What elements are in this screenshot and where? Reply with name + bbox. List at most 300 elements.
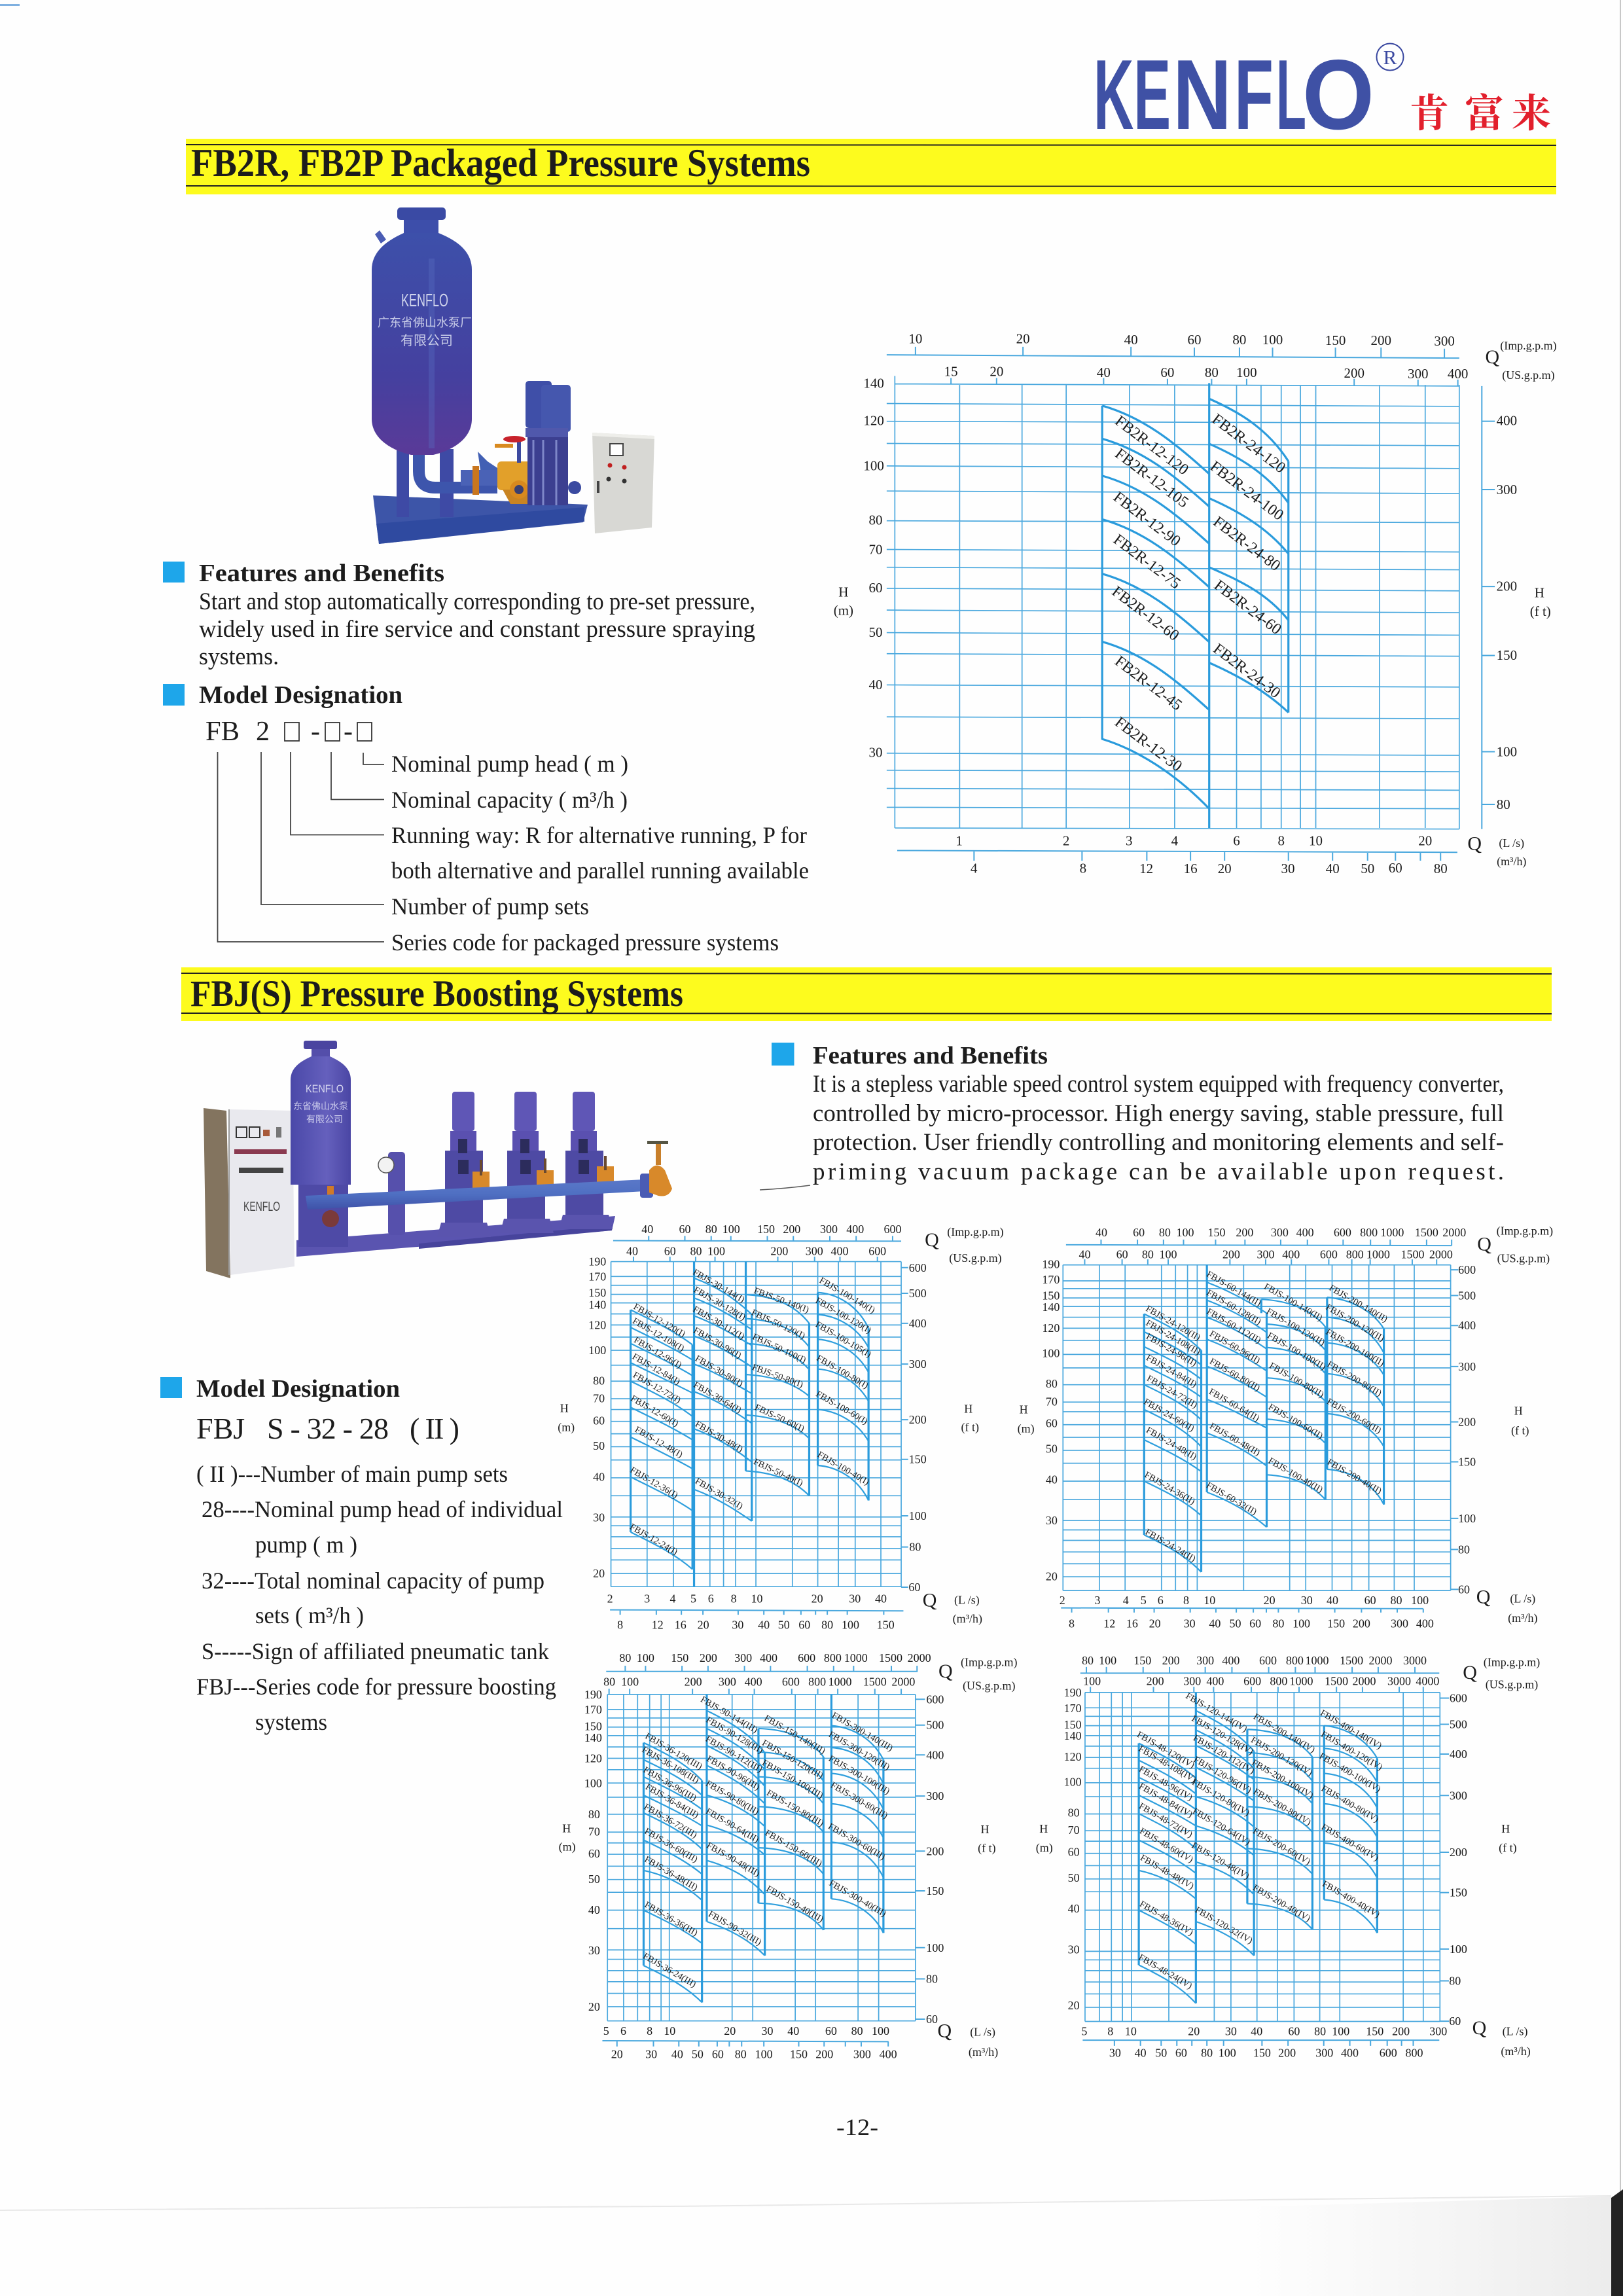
axis numbers: 140 [588, 1299, 606, 1312]
axis numbers: 16 [1184, 861, 1198, 876]
axis titles and units [559, 1656, 1018, 2059]
axis numbers: 140 [863, 375, 884, 391]
axis numbers: 200 [685, 1675, 702, 1688]
features and benefits: FB2R: Start and stop automatically corresponding to pre-set pressure, [199, 588, 755, 615]
curve labels: FBJS-100-100(II) [1266, 1331, 1327, 1372]
curve labels: FBJS-50-120(I) [750, 1308, 807, 1342]
axis numbers: 100 [1236, 365, 1257, 380]
curve labels: FBJS-36-36(III) [643, 1900, 700, 1939]
axis titles and units: (f t) [1511, 1424, 1529, 1438]
performance chart: FB2R [834, 331, 1557, 876]
axis numbers: 150 [790, 2047, 808, 2060]
axis numbers: 400 [1416, 1617, 1434, 1630]
axis numbers: 200 [1371, 332, 1391, 348]
axis numbers: 400 [909, 1317, 927, 1330]
axis numbers: 12 [652, 1618, 664, 1631]
axis numbers: 300 [719, 1675, 736, 1688]
axis numbers: 30 [1109, 2047, 1121, 2060]
curve labels: FBJS-200-40(II) [1325, 1458, 1383, 1497]
grid lines [1085, 1693, 1440, 2022]
features and benefits: FB2R: systems. [199, 643, 279, 670]
axis numbers: 140 [1042, 1300, 1060, 1314]
axis numbers: 70 [1068, 1823, 1080, 1837]
model designation: FB2R: Running way: R for alternative running, P for [391, 822, 807, 848]
axis numbers: 40 [1251, 2025, 1262, 2038]
curve labels: FBJS-90-48(III) [705, 1840, 762, 1879]
axis titles and units: (Imp.g.p.m) [1500, 339, 1557, 353]
axis numbers: 8 [1069, 1617, 1075, 1630]
axis numbers: 200 [700, 1651, 717, 1664]
axis numbers: 80 [1390, 1594, 1402, 1607]
curve labels: FB2R-12-105 [1112, 445, 1192, 511]
curve labels: FBJS-24-48(II) [1144, 1426, 1198, 1462]
axis numbers: 100 [1497, 744, 1517, 760]
axis numbers: 500 [1450, 1717, 1467, 1731]
curve labels: FBJS-200-100(II) [1324, 1327, 1386, 1369]
axis numbers: 2000 [891, 1675, 915, 1688]
axis numbers: 300 [806, 1245, 823, 1258]
axis numbers: 40 [1124, 332, 1138, 348]
curve labels: FBJS-50-40(I) [752, 1457, 804, 1488]
curve labels: FBJS-60-48(II) [1207, 1422, 1262, 1458]
axis numbers: 50 [1361, 861, 1374, 876]
curve labels: FBJS-12-120(I) [632, 1302, 687, 1340]
axis titles and units: (Imp.g.p.m) [1497, 1225, 1553, 1238]
axis numbers: 3000 [1387, 1675, 1411, 1688]
axis numbers: 60 [1133, 1226, 1145, 1239]
axis numbers: 1000 [844, 1651, 868, 1664]
axis numbers: 150 [1064, 1718, 1082, 1731]
curve labels: FBJS-60-144(II) [1205, 1270, 1262, 1309]
axis numbers: 100 [1293, 1617, 1310, 1630]
axis numbers: 30 [1184, 1617, 1196, 1630]
axis numbers: 80 [1068, 1806, 1080, 1819]
axis numbers: 4000 [1416, 1675, 1439, 1688]
axis numbers: 200 [783, 1223, 800, 1236]
curve labels: FBJS-200-80(II) [1325, 1359, 1383, 1399]
features and benefits: FB2R: widely used in fire service and constant pressure spraying [199, 616, 755, 643]
axis numbers: 80 [821, 1618, 833, 1631]
axis numbers: 300 [1497, 482, 1517, 497]
curve labels: FB2R-12-45 [1111, 653, 1185, 714]
page number: -12- [836, 2114, 878, 2140]
axis numbers: 100 [707, 1245, 725, 1258]
curve labels: FBJS-30-144(I) [691, 1268, 746, 1305]
axis numbers: 8 [1183, 1594, 1189, 1607]
axis numbers: 150 [588, 1286, 606, 1299]
curve labels: FBJS-100-80(I) [815, 1354, 870, 1391]
axis numbers: 6 [708, 1592, 714, 1605]
curve labels: FBJS-12-36(I) [628, 1465, 679, 1501]
axis titles and units: (m³/h) [953, 1612, 982, 1626]
axis titles and units: H [1535, 585, 1544, 601]
axis numbers: 60 [1288, 2025, 1300, 2038]
axis numbers: 1 [955, 833, 963, 848]
axis numbers: 600 [868, 1245, 886, 1258]
axis numbers: 600 [1450, 1692, 1467, 1705]
axis numbers: 80 [1046, 1377, 1058, 1390]
logo: KENFLO: L [1276, 39, 1306, 151]
model designation: FB2R: 2 [256, 717, 270, 747]
axis numbers: 150 [926, 1884, 944, 1897]
axis numbers: 30 [1281, 861, 1294, 876]
axis numbers: 400 [880, 2047, 897, 2060]
curve labels: FBJS-150-60(III) [763, 1828, 824, 1869]
axis numbers: 100 [1458, 1512, 1476, 1525]
curve labels: FBJS-60-32(II) [1204, 1480, 1258, 1518]
axis numbers: 800 [1270, 1675, 1287, 1688]
curve labels: FBJS-90-96(III) [705, 1754, 762, 1793]
axis numbers: 200 [1353, 1617, 1370, 1630]
axis numbers: 1500 [1325, 1675, 1348, 1688]
axis numbers: 100 [637, 1651, 654, 1664]
axis numbers: 140 [584, 1731, 602, 1744]
axis numbers: 600 [926, 1693, 944, 1706]
curve labels: FBJS-24-72(II) [1145, 1374, 1199, 1410]
model designation: FB2R: Series code for packaged pressure systems [391, 929, 779, 956]
axis numbers: 20 [1149, 1617, 1161, 1630]
axis numbers: 300 [1315, 2047, 1333, 2060]
axis numbers: 200 [1147, 1675, 1164, 1688]
curve labels: FBJS-60-96(II) [1207, 1329, 1262, 1366]
axis titles and units: (m³/h) [969, 2045, 998, 2059]
axis titles and units: Q [1477, 1234, 1491, 1255]
product photo: FB2R packaged pressure system: 有限公司 [401, 333, 453, 348]
axis numbers: 400 [831, 1245, 849, 1258]
curve labels: FBJS-300-100(III) [827, 1754, 891, 1797]
axis numbers: 80 [869, 512, 882, 528]
curve labels: FBJS-30-32(I) [693, 1477, 745, 1512]
axis numbers: 20 [1264, 1594, 1275, 1607]
axis numbers: 400 [760, 1651, 777, 1664]
curve labels: FBJS-30-48(I) [693, 1420, 745, 1455]
curve labels: FBJS-36-72(III) [642, 1802, 699, 1840]
axis numbers: 80 [1272, 1617, 1284, 1630]
curve labels: FBJS-36-24(III) [641, 1952, 698, 1990]
axis numbers: 20 [611, 2047, 623, 2060]
axis numbers: 1500 [1340, 1654, 1363, 1667]
axis numbers: 2000 [908, 1651, 931, 1664]
pump curves [1139, 1693, 1377, 2003]
curve labels: FBJS-300-120(III) [827, 1730, 891, 1772]
curve labels: FBJS-48-84(IV) [1137, 1782, 1194, 1820]
curve labels: FBJS-50-140(I) [753, 1286, 810, 1316]
model designation: FBJ(S): S-----Sign of affiliated pneumatic tank [202, 1638, 549, 1664]
curve labels: FBJS-120-128(IV) [1190, 1714, 1255, 1757]
axis numbers: 3 [1094, 1594, 1100, 1607]
curve labels: FBJS-36-96(III) [641, 1765, 698, 1804]
curve labels: FBJS-30-64(I) [692, 1380, 743, 1416]
axis numbers: 50 [1230, 1617, 1241, 1630]
logo: KENFLO: N [1173, 39, 1232, 151]
axis numbers: 300 [1271, 1226, 1289, 1239]
axis numbers: 16 [1126, 1617, 1138, 1630]
axis numbers: 800 [1346, 1248, 1364, 1261]
axis numbers: 40 [758, 1618, 770, 1631]
curve labels: FBJS-100-60(I) [814, 1390, 869, 1427]
axis titles and units: H [838, 584, 848, 600]
curve labels: FBJS-36-120(III) [643, 1731, 704, 1772]
axis numbers: 80 [705, 1223, 717, 1236]
axis numbers: 10 [664, 2024, 675, 2037]
axis numbers: 100 [1219, 2047, 1236, 2060]
axis numbers: 40 [1097, 365, 1111, 380]
axis numbers: 1500 [863, 1675, 887, 1688]
axis numbers: 10 [908, 331, 922, 347]
model designation: FB2R: Nominal capacity ( m³/h ) [391, 787, 628, 813]
curve labels: FBJS-60-112(II) [1205, 1307, 1262, 1346]
curve labels: FBJS-90-32(III) [706, 1909, 763, 1948]
axis numbers: 30 [1301, 1594, 1313, 1607]
axis numbers: 4 [1171, 833, 1179, 848]
axis numbers: 20 [1046, 1570, 1058, 1583]
axis titles and units: (L /s) [954, 1594, 980, 1607]
curve labels: FBJS-60-80(II) [1207, 1357, 1262, 1393]
curve labels: FBJS-400-120(IV) [1319, 1730, 1384, 1773]
model designation: FBJ(S): FBJ---Series code for pressure boosting [196, 1674, 556, 1700]
axis numbers [1064, 1654, 1467, 2060]
axis numbers: 50 [778, 1618, 790, 1631]
axis numbers: 4 [670, 1592, 676, 1605]
axis numbers: 80 [1082, 1654, 1094, 1667]
axis numbers: 30 [1046, 1514, 1058, 1527]
curve labels: FBJS-24-108(II) [1144, 1318, 1202, 1357]
features and benefits: FBJ(S): protection. User friendly controlling and monitoring elements and self- [813, 1129, 1504, 1156]
axis numbers: 30 [762, 2024, 774, 2037]
axis numbers: 60 [1449, 2015, 1461, 2028]
axis numbers: 20 [990, 364, 1003, 380]
axis numbers: 500 [926, 1719, 944, 1732]
axis numbers: 40 [1326, 861, 1340, 876]
model designation: FBJ(S) [160, 1375, 563, 1735]
curve labels: FBJS-100-120(I) [813, 1296, 873, 1336]
axis numbers: 600 [1334, 1226, 1351, 1239]
axis numbers: 150 [1133, 1654, 1151, 1667]
pump curves [631, 1262, 868, 1587]
model designation: FBJ(S): ( II ) [410, 1412, 459, 1445]
product photo: FB2R packaged pressure system [372, 207, 654, 544]
axis numbers: 16 [675, 1618, 687, 1631]
axis numbers: 400 [1497, 413, 1517, 429]
axis numbers: 300 [1450, 1789, 1467, 1802]
curve labels [1142, 1270, 1389, 1564]
curve labels: FBJS-48-48(IV) [1138, 1853, 1196, 1892]
curve labels: FBJS-400-100(IV) [1317, 1751, 1382, 1795]
axis numbers: 200 [1344, 365, 1364, 381]
features and benefits: FBJ(S): It is a stepless variable speed control system equipped with frequency converter, [813, 1071, 1504, 1098]
axis numbers: 8 [1107, 2025, 1113, 2038]
axis numbers: 500 [909, 1287, 927, 1300]
features and benefits: FBJ(S): controlled by micro-processor. High energy saving, stable pressure, full [813, 1100, 1504, 1127]
axis numbers: 80 [1449, 1975, 1461, 1988]
axis titles and units: H [1514, 1405, 1523, 1418]
axis titles and units: Q [1472, 2017, 1487, 2039]
axis numbers: 120 [1064, 1750, 1082, 1763]
features and benefits: FBJ(S): Features and Benefits [813, 1042, 1048, 1069]
axis numbers: 300 [1391, 1617, 1408, 1630]
axis numbers: 40 [1327, 1594, 1338, 1607]
axis numbers: 8 [647, 2024, 652, 2037]
axis titles and units: Q [1486, 346, 1500, 368]
curve labels: FBJS-150-140(III) [762, 1713, 827, 1757]
axis numbers: 5 [1141, 1594, 1147, 1607]
axis numbers: 80 [909, 1541, 921, 1554]
axis numbers: 50 [593, 1439, 605, 1452]
axis numbers: 2000 [1442, 1226, 1466, 1239]
axis titles and units: Q [1463, 1662, 1477, 1683]
axis numbers: 40 [875, 1592, 887, 1605]
axis numbers: 10 [1309, 833, 1323, 848]
section heading: FB2R, FB2P [186, 139, 1556, 194]
axis numbers: 80 [735, 2047, 747, 2060]
curve labels: FBJS-24-60(II) [1142, 1397, 1196, 1434]
axis numbers: 1000 [1380, 1226, 1404, 1239]
axis numbers: 80 [1314, 2025, 1326, 2038]
curve labels: FBJS-200-120(IV) [1249, 1735, 1314, 1778]
axis numbers: 300 [1257, 1248, 1274, 1261]
model designation: FBJ(S): 32----Total nominal capacity of pump [202, 1568, 544, 1594]
axis numbers: 150 [757, 1223, 775, 1236]
axis numbers: 40 [1209, 1617, 1221, 1630]
axis numbers: 10 [1125, 2025, 1137, 2038]
grid lines [611, 1262, 901, 1587]
axis numbers: 50 [1046, 1442, 1058, 1455]
axis numbers: 600 [1380, 2047, 1397, 2060]
axis numbers: 60 [1458, 1583, 1470, 1596]
features and benefits: FB2R: Features and Benefits [199, 560, 444, 587]
curve labels: FBJS-120-96(IV) [1192, 1755, 1253, 1796]
axis numbers: 80 [1201, 2047, 1213, 2060]
axis numbers: 1000 [1290, 1675, 1313, 1688]
axis titles and units: (Imp.g.p.m) [947, 1225, 1004, 1239]
axis numbers: 60 [798, 1618, 810, 1631]
logo: KENFLO: 肯富来 [1410, 92, 1551, 135]
axis numbers: 70 [588, 1825, 600, 1838]
axis numbers: 8 [1080, 861, 1086, 876]
axis numbers: 400 [1341, 2047, 1359, 2060]
axis numbers: 600 [909, 1261, 927, 1274]
axis numbers: 190 [584, 1688, 602, 1701]
axis titles and units: (US.g.p.m) [1502, 368, 1555, 382]
curve labels: FBJS-12-96(I) [632, 1335, 683, 1371]
section heading: FBJ(S) [181, 967, 1552, 1021]
axis numbers [584, 1651, 944, 2060]
axis numbers: 2 [607, 1592, 613, 1605]
axis titles and units: (m³/h) [1497, 855, 1526, 869]
axis titles and units: Q [1476, 1586, 1491, 1607]
axis titles and units: (US.g.p.m) [949, 1251, 1002, 1265]
axis numbers: 8 [617, 1618, 623, 1631]
axis numbers: 200 [1497, 579, 1517, 594]
axis numbers: 200 [1392, 2025, 1410, 2038]
model designation: FB2R: FB [205, 717, 240, 747]
axis numbers: 150 [1325, 332, 1346, 348]
axis numbers: 20 [812, 1592, 823, 1605]
axis numbers: 60 [1068, 1846, 1080, 1859]
axis numbers: 50 [869, 624, 882, 640]
model designation: FBJ(S): sets ( m³/h ) [255, 1602, 364, 1628]
axis numbers: 80 [1458, 1543, 1470, 1556]
axis numbers: 600 [798, 1651, 815, 1664]
axis numbers: 200 [815, 2047, 833, 2060]
axis numbers: 100 [1042, 1346, 1060, 1359]
axis titles and units: (Imp.g.p.m) [961, 1656, 1018, 1670]
grid lines [607, 1695, 916, 2021]
axis numbers: 100 [1177, 1226, 1194, 1239]
product photo: FBJ(S) pressure boosting system: 有限公司 [306, 1114, 343, 1124]
axis numbers: 80 [1142, 1248, 1154, 1261]
pump curves [643, 1695, 883, 2002]
curve labels: FB2R-12-90 [1110, 489, 1184, 550]
axis numbers [1042, 1226, 1476, 1630]
axis numbers: 600 [1320, 1248, 1338, 1261]
axis numbers: 200 [1222, 1248, 1240, 1261]
curve labels: FBJS-100-40(II) [1266, 1456, 1325, 1495]
axis numbers: 80 [593, 1374, 605, 1387]
curve labels: FBJS-100-120(II) [1264, 1306, 1327, 1348]
axis numbers: 20 [698, 1618, 709, 1631]
curve labels: FBJS-200-120(II) [1324, 1302, 1386, 1344]
curve labels: FBJS-48-24(IV) [1137, 1953, 1194, 1992]
axis titles and units: H [981, 1823, 990, 1836]
axis numbers: 190 [1064, 1686, 1082, 1699]
curve labels: FBJS-120-32(IV) [1193, 1905, 1254, 1946]
axis numbers: 20 [1218, 861, 1232, 876]
axis numbers: 200 [1278, 2047, 1296, 2060]
axis numbers: 30 [849, 1592, 861, 1605]
axis numbers: 20 [1016, 331, 1030, 347]
curve labels: FB2R-12-30 [1111, 714, 1185, 775]
axis numbers: 150 [1458, 1456, 1476, 1469]
axis numbers: 3 [1126, 833, 1132, 848]
axis numbers: 10 [751, 1592, 763, 1605]
curve labels: FBJS-120-48(IV) [1190, 1841, 1251, 1882]
model designation: FBJ(S): 28----Nominal pump head of individual [202, 1496, 563, 1522]
axis lines and ticks [1061, 1240, 1458, 1613]
axis numbers: 20 [593, 1567, 605, 1580]
curve labels: FBJS-100-140(II) [1262, 1282, 1324, 1323]
model designation: FB2R: - [344, 717, 353, 747]
axis numbers: 8 [731, 1592, 737, 1605]
axis numbers: 300 [1183, 1675, 1201, 1688]
axis numbers: 40 [593, 1471, 605, 1484]
axis numbers: 600 [883, 1223, 901, 1236]
curve labels: FBJS-12-24(I) [628, 1522, 679, 1558]
axis numbers: 170 [1064, 1702, 1082, 1715]
axis titles and units: Q [938, 2020, 952, 2041]
curve labels: FBJS-50-80(I) [751, 1363, 804, 1390]
axis numbers: 400 [745, 1675, 762, 1688]
model designation: FB2R: Nominal pump head ( m ) [391, 751, 628, 777]
axis numbers: 600 [1243, 1675, 1261, 1688]
section heading: FB2R, FB2P: FB2R, FB2P Packaged Pressure Systems [191, 141, 810, 185]
curve labels: FBJS-300-80(III) [829, 1780, 889, 1821]
axis titles and units: Q [925, 1229, 939, 1251]
axis titles and units: (m) [1036, 1841, 1053, 1855]
axis numbers: 100 [1064, 1775, 1082, 1788]
model designation: FBJ(S): FBJ [196, 1412, 245, 1445]
axis numbers [863, 331, 1517, 876]
axis numbers: 300 [1458, 1360, 1476, 1373]
axis numbers: 1000 [1366, 1248, 1390, 1261]
axis numbers: 300 [820, 1223, 838, 1236]
curve labels: FBJS-300-40(III) [827, 1878, 888, 1919]
curve labels: FBJS-200-140(II) [1327, 1283, 1389, 1325]
axis numbers: 15 [944, 364, 958, 380]
curve labels: FB2R-12-120 [1112, 412, 1192, 478]
icon: blue bullet [772, 1043, 794, 1066]
curve labels: FBJS-12-84(I) [630, 1352, 682, 1388]
